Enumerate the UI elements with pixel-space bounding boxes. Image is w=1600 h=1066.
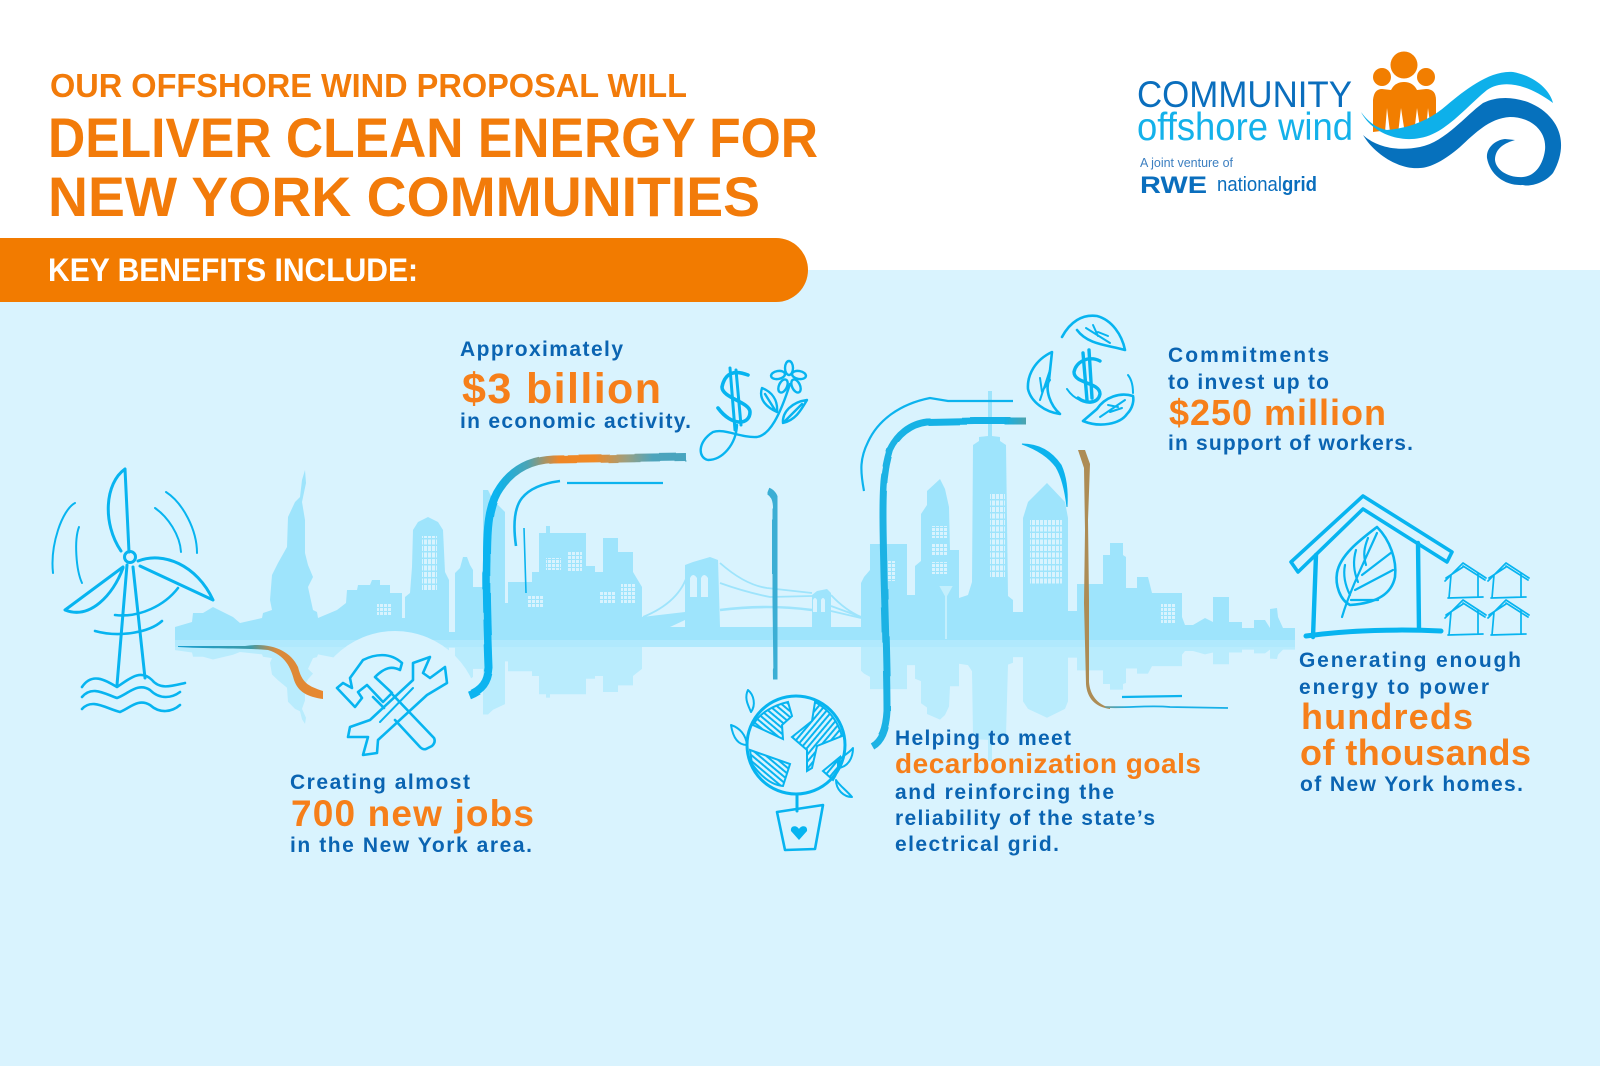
logo wordmark: COMMUNITY — [1137, 74, 1352, 115]
skyline — [175, 391, 1295, 640]
text block: homes: Generating enough — [1299, 649, 1521, 672]
connector: orange line to jobs — [178, 645, 323, 699]
key benefits banner — [0, 238, 808, 302]
background panel — [0, 270, 1600, 1066]
icon: small houses — [1445, 563, 1529, 635]
logo: Community Offshore Wind: offshore wind — [1137, 106, 1353, 149]
text block: decarbonization — [895, 727, 1201, 856]
title: DELIVER CLEAN ENERGY FOR — [48, 106, 818, 169]
connector: large arc to decarbonization — [872, 421, 1026, 746]
text block: worker investment: Commitments — [1168, 344, 1329, 367]
text block: economic activity: $3 billion — [462, 365, 661, 413]
text block: jobs: in the New York area. — [290, 834, 532, 857]
tools backdrop circle — [310, 631, 480, 801]
logo waves — [1361, 72, 1553, 139]
street lamp — [941, 587, 951, 639]
text block: jobs — [290, 771, 534, 857]
subtitle heading: OUR OFFSHORE WIND PROPOSAL WILL — [50, 67, 687, 104]
text block: homes — [1299, 649, 1531, 796]
bridge — [643, 563, 861, 618]
building windows — [377, 494, 1176, 624]
logo people icon — [1373, 52, 1436, 134]
text block: worker investment: in support of workers. — [1168, 432, 1413, 455]
title: NEW YORK COMMUNITIES — [48, 165, 760, 228]
text block: homes: energy to power — [1299, 676, 1489, 699]
text block: worker investment: $250 million — [1169, 392, 1386, 433]
text block: decarbonization: decarbonization goals — [895, 748, 1201, 779]
text block: homes: of New York homes. — [1300, 773, 1523, 796]
text block: decarbonization: reliability of the state’s — [895, 807, 1155, 830]
text block: decarbonization: and reinforcing the — [895, 781, 1114, 804]
text block: jobs: 700 new jobs — [291, 793, 534, 834]
text block: homes: of thousands — [1300, 732, 1531, 773]
text block: worker investment — [1168, 344, 1413, 455]
connector: vertical teal line — [768, 491, 777, 680]
text block: worker investment: to invest up to — [1168, 371, 1329, 394]
icon: recycling leaves with dollar — [1028, 316, 1133, 425]
connector: arc to economic activity — [469, 457, 686, 695]
logo: Community Offshore Wind: A joint venture of — [1140, 155, 1233, 170]
connector: thin inner arc — [514, 481, 663, 593]
logo: Community Offshore Wind: RWE — [1140, 172, 1207, 199]
text block: economic activity: in economic activity. — [460, 410, 691, 433]
title — [48, 106, 818, 228]
connector: thin right arc — [1022, 444, 1067, 507]
logo: Community Offshore Wind: nationalgrid — [1217, 174, 1317, 196]
text block: economic activity: Approximately — [460, 338, 623, 361]
icon: wind turbine — [53, 469, 213, 712]
text block: jobs: Creating almost — [290, 771, 470, 794]
icon: hammer and wrench — [337, 655, 447, 755]
skyline reflection — [175, 640, 1295, 761]
text block: economic activity — [460, 338, 691, 433]
icon: house with leaf — [1291, 496, 1452, 637]
logo: Community Offshore Wind — [1137, 52, 1561, 199]
connector: thin outer arc — [861, 398, 1013, 491]
text block: decarbonization: electrical grid. — [895, 833, 1059, 856]
connector: brown line to homes — [1078, 450, 1228, 709]
icon: dollar sign and flower — [701, 361, 807, 460]
text block: decarbonization: Helping to meet — [895, 727, 1071, 750]
key benefits banner: KEY BENEFITS INCLUDE: — [48, 252, 418, 288]
text block: homes: hundreds — [1301, 696, 1473, 737]
icon: globe in plant pot — [731, 690, 853, 850]
